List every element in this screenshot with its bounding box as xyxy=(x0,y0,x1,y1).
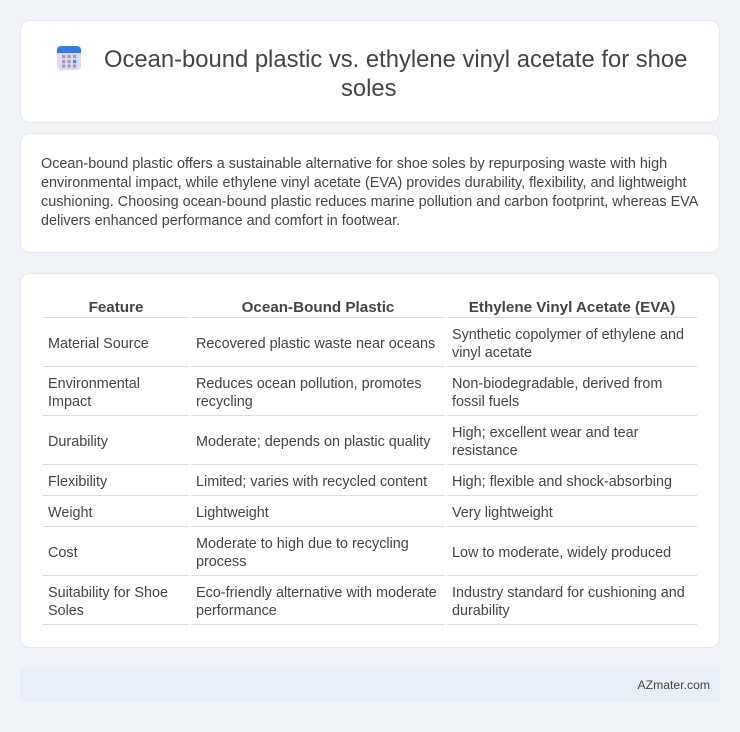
row: suitability for shoe soles: Suitability for Shoe xyxy=(48,585,168,601)
panel: summary card xyxy=(20,133,720,253)
row: durability: High; excellent wear and tear xyxy=(452,425,638,441)
summary text: delivers enhanced performance and comfort in footwear. xyxy=(41,213,400,229)
row: suitability for shoe soles: Industry standard for cushioning and xyxy=(452,585,685,601)
row: cost: Low to moderate, widely produced xyxy=(452,545,671,561)
summary text: cushioning. Choosing ocean-bound plastic reduces marine pollution and carbon footprint, whereas EVA xyxy=(41,194,698,210)
icon: calendar xyxy=(57,46,81,70)
title: soles xyxy=(341,75,397,102)
row: weight xyxy=(48,505,553,521)
row: flexibility: High; flexible and shock-absorbing xyxy=(452,474,672,490)
row: flexibility: Flexibility xyxy=(48,474,107,490)
table header xyxy=(89,299,675,316)
row: environmental impact: Impact xyxy=(48,394,91,410)
row: durability: Moderate; depends on plastic quality xyxy=(196,434,430,450)
footer brand text: AZmater.com xyxy=(638,678,710,692)
row: suitability for shoe soles: performance xyxy=(196,603,277,619)
row: cost: Moderate to high due to recycling xyxy=(196,536,409,552)
comparison table xyxy=(43,299,697,625)
row: durability: Durability xyxy=(48,434,108,450)
row: environmental impact: Environmental xyxy=(48,376,140,392)
table header: Feature xyxy=(89,299,143,316)
row: material source: Material Source xyxy=(48,336,149,352)
row: material source xyxy=(48,327,684,361)
footer bar xyxy=(20,668,720,702)
row: cost: process xyxy=(196,554,246,570)
row: suitability for shoe soles: durability xyxy=(452,603,510,619)
title: Ocean-bound plastic vs. ethylene vinyl acetate for shoe xyxy=(104,46,687,73)
row: suitability for shoe soles xyxy=(48,585,685,619)
table header: Ethylene Vinyl Acetate (EVA) xyxy=(469,299,675,316)
row: material source: Synthetic copolymer of ethylene and xyxy=(452,327,684,343)
row: cost: Cost xyxy=(48,545,78,561)
summary text: Ocean-bound plastic offers a sustainable alternative for shoe soles by repurposing waste with high xyxy=(41,156,667,172)
row: weight: Weight xyxy=(48,505,93,521)
row: environmental impact: recycling xyxy=(196,394,253,410)
row: weight: Lightweight xyxy=(196,505,269,521)
row: flexibility xyxy=(48,474,672,490)
row: environmental impact: fossil fuels xyxy=(452,394,519,410)
row: flexibility: Limited; varies with recycled content xyxy=(196,474,427,490)
row: environmental impact: Reduces ocean pollution, promotes xyxy=(196,376,422,392)
row: suitability for shoe soles: Eco-friendly alternative with moderate xyxy=(196,585,437,601)
row: material source: Recovered plastic waste near oceans xyxy=(196,336,435,352)
panel: title card xyxy=(20,20,720,123)
row: environmental impact: Non-biodegradable, derived from xyxy=(452,376,662,392)
panel: comparison table card xyxy=(20,273,720,648)
table header: Ocean-Bound Plastic xyxy=(242,299,394,316)
row: cost xyxy=(48,536,671,570)
row: durability xyxy=(48,425,638,459)
row: durability: resistance xyxy=(452,443,518,459)
summary text xyxy=(41,156,698,229)
summary text: environmental impact, while ethylene vinyl acetate (EVA) provides durability, flexibility, and lightweight xyxy=(41,175,686,191)
row: material source: vinyl acetate xyxy=(452,345,532,361)
row: weight: Very lightweight xyxy=(452,505,553,521)
row: suitability for shoe soles: Soles xyxy=(48,603,84,619)
title xyxy=(104,46,687,102)
row: environmental impact xyxy=(48,376,662,410)
